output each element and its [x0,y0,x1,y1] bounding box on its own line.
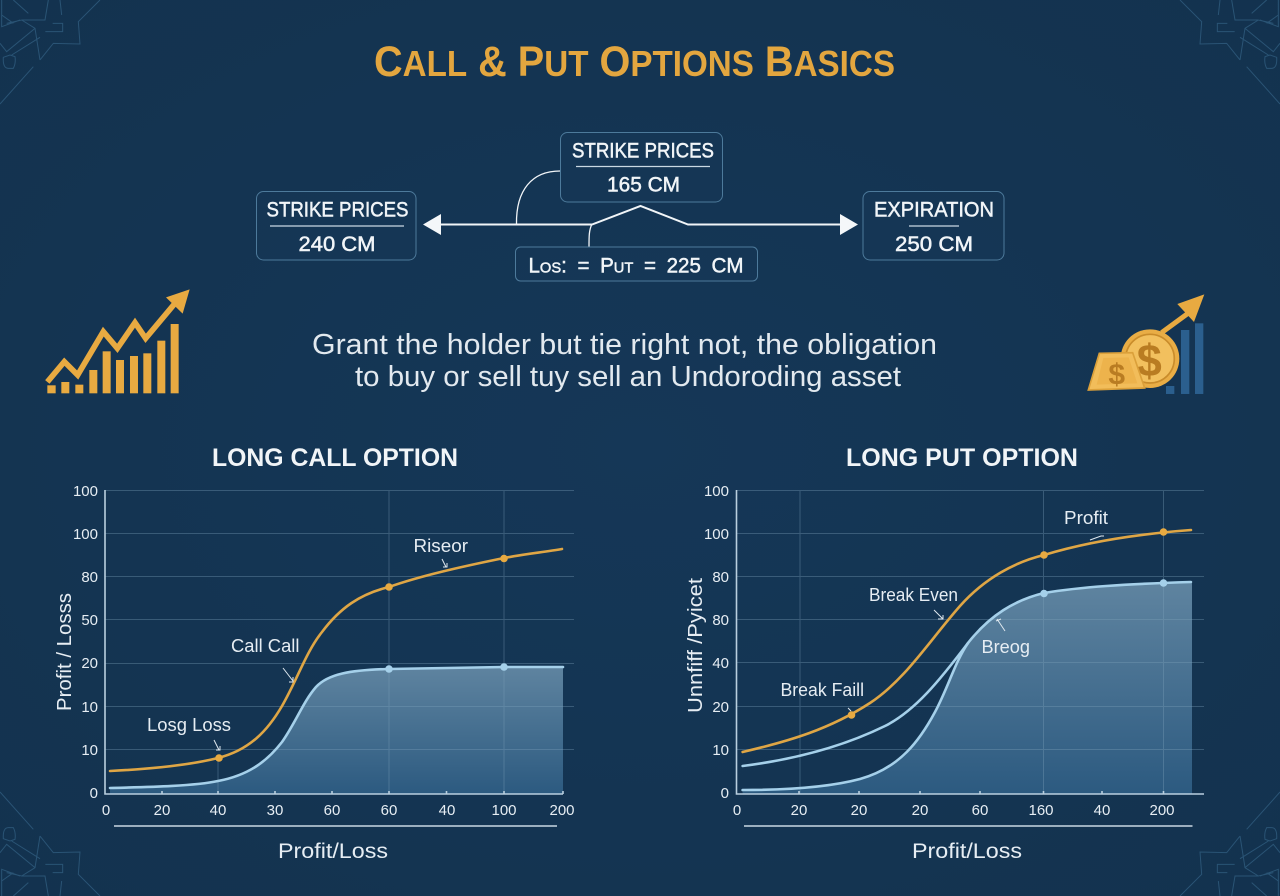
annotation: Call Call [231,636,300,682]
corner ornament: top right [1180,0,1280,104]
annotation: Profit: Profit [1064,508,1108,528]
annotation: Riseor [414,536,468,567]
title: CALL & PUT OPTIONS BASICS [374,38,895,86]
icon: gold coins with arrow and bars: $ [1108,359,1125,392]
long curve [110,549,562,771]
annotation: Break Faill [780,680,864,711]
x tick labels [102,802,575,819]
icon: gold coins with arrow and bars: $ [1137,335,1162,386]
y axis label: Unnfiff /Pyicet [685,578,707,713]
x axis label: Profit/Loss [278,840,388,863]
x tick labels: 40 [1094,802,1110,819]
annotation: Break Faill: Break Faill [780,680,864,700]
y tick labels: 100 [704,483,729,500]
short curve [110,667,563,788]
y tick labels: 100 [73,526,98,543]
annotation: Break Even: Break Even [869,585,958,605]
box: expiration: EXPIRATION [874,198,994,222]
connector lines [436,171,846,247]
annotation: Breog [982,619,1030,657]
x tick labels: 40 [439,802,455,819]
x tick labels: 20 [912,802,928,819]
axes [105,490,563,794]
x tick labels: 60 [324,802,340,819]
box: expiration [863,192,1004,260]
arrow: left [423,214,441,235]
area fill [743,582,1192,794]
x tick labels [733,802,1175,819]
arrow: right [840,214,858,235]
description text: to buy or sell tuy sell an Undoroding asset [355,361,901,393]
y tick labels: 0 [90,785,98,802]
y tick labels: 0 [721,785,729,802]
annotation: Breog: Breog [982,637,1030,657]
box: loss equals put: Los: = Put = 225 CM [528,254,744,278]
corner ornament: bottom right [1180,792,1280,896]
description text: Grant the holder but tie right not, the obligation [312,329,937,361]
y tick labels: 10 [81,699,98,716]
box: strike prices left: 240 CM [298,233,376,256]
icon: gold coins with arrow and bars [1088,294,1204,394]
axes [736,490,1204,794]
x tick labels: 40 [210,802,226,819]
chart: long put option [685,483,1204,863]
x axis underline [744,825,1192,827]
x tick labels: 30 [267,802,283,819]
x tick labels: 100 [491,802,517,819]
heading: long put option: LONG PUT OPTION [846,444,1078,472]
y tick labels: 40 [712,655,729,672]
y tick labels: 80 [712,569,729,586]
box: strike prices left: STRIKE PRICES [266,198,408,222]
y tick labels [73,483,98,802]
y tick labels: 20 [712,699,729,716]
annotation: Profit [1064,508,1108,540]
grid [105,490,574,794]
corner ornament: bottom left [0,792,100,896]
y axis label: Profit / Losss [54,593,76,711]
x tick labels: 20 [791,802,807,819]
x tick labels: 0 [733,802,741,819]
icon: rising chart with arrow [47,289,190,393]
x tick labels: 200 [1149,802,1175,819]
y tick labels: 50 [81,612,98,629]
area fill [110,666,563,794]
annotation: Losg Loss: Losg Loss [147,715,231,735]
box: strike prices centre: 165 CM [607,174,680,196]
lower curve [743,643,968,790]
chart: long call option [54,483,575,863]
box: expiration: 250 CM [895,233,973,256]
x tick labels: 60 [972,802,988,819]
y tick labels: 10 [81,742,98,759]
y tick labels: 10 [712,742,729,759]
x axis underline [114,825,557,827]
annotation: Losg Loss [147,715,231,750]
corner ornament: top left [0,0,100,104]
heading: long call option: LONG CALL OPTION [212,444,458,472]
annotation: Call Call: Call Call [231,636,300,656]
box: strike prices centre [560,132,722,202]
box: strike prices centre: STRIKE PRICES [572,140,714,162]
box: strike prices left [256,192,416,260]
x tick labels: 160 [1028,802,1054,819]
grid [736,490,1204,794]
y tick labels: 100 [704,526,729,543]
x tick labels: 200 [549,802,575,819]
data points [215,555,508,762]
x tick labels: 60 [381,802,397,819]
box: loss equals put [516,247,758,281]
upper curve [743,530,1191,752]
y tick labels: 20 [81,655,98,672]
annotation: Riseor: Riseor [414,536,468,556]
x tick labels: 0 [102,802,110,819]
annotation: Break Even [869,585,958,619]
description text [312,329,937,393]
y tick labels: 100 [73,483,98,500]
x tick labels: 20 [851,802,867,819]
y tick labels: 80 [81,569,98,586]
y tick labels: 80 [712,612,729,629]
x axis label: Profit/Loss [912,840,1022,863]
data points [848,528,1167,719]
y tick labels [704,483,729,802]
middle curve [743,582,1191,766]
x tick labels: 20 [154,802,170,819]
diagram: strike price timeline [256,132,1004,281]
